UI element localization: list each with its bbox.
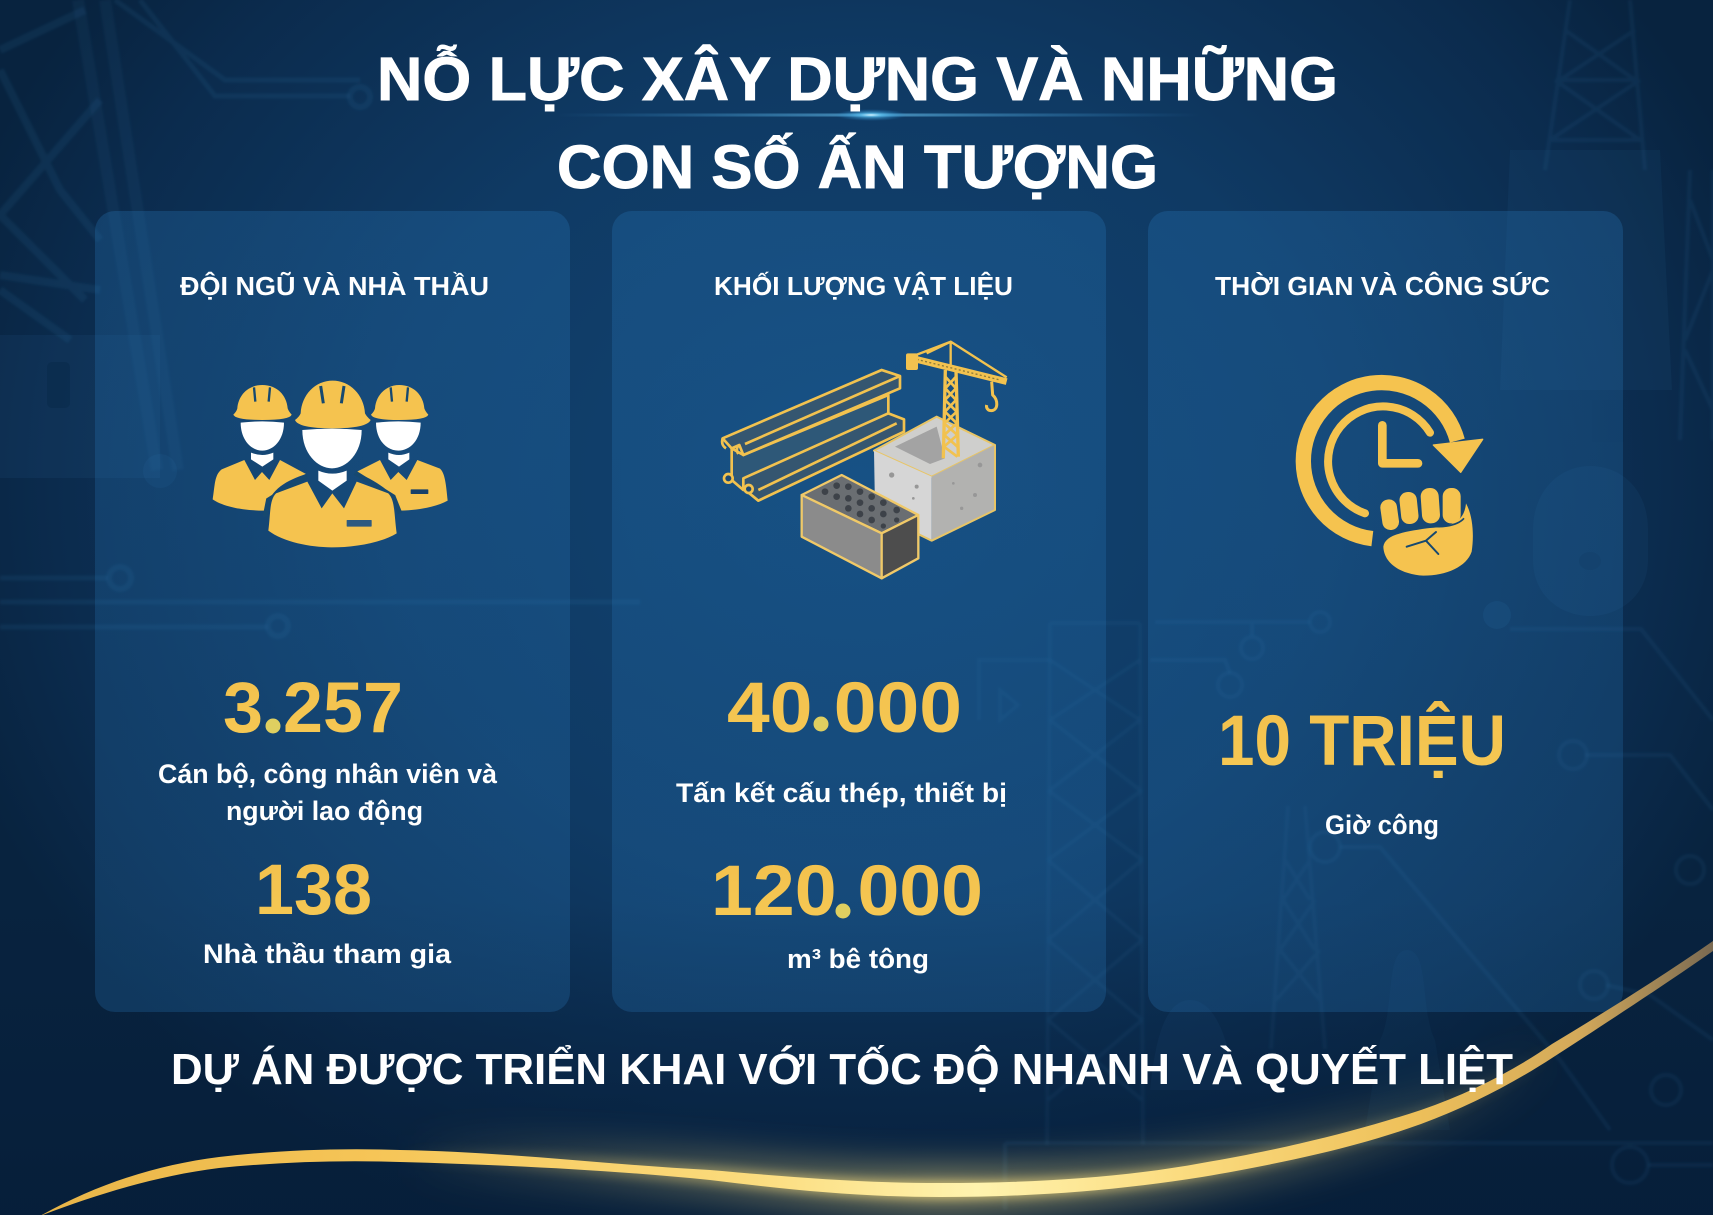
panel: time and effort — [1148, 211, 1623, 1012]
title light flare — [557, 109, 1200, 121]
stat: 10 million man-hours: Giờ công — [1325, 810, 1439, 840]
stat: 40.000 tons of steel — [676, 669, 1007, 808]
heading: team: ĐỘI NGŨ VÀ NHÀ THẦU — [180, 271, 489, 301]
panel: material volume — [612, 211, 1106, 1012]
stat: 10 million man-hours: 10 TRIỆU — [1218, 701, 1506, 781]
title — [377, 45, 1338, 201]
icon: steel beams, concrete blocks and crane — [722, 342, 1007, 578]
icon: clock with arrow and raised fist — [1303, 383, 1483, 576]
stat: 138 contractors: 138 — [255, 851, 372, 930]
golden swoosh — [40, 941, 1713, 1215]
stat: 120.000 m3 concrete — [711, 852, 983, 974]
heading: time: THỜI GIAN VÀ CÔNG SỨC — [1215, 271, 1550, 301]
closing statement: DỰ ÁN ĐƯỢC TRIỂN KHAI VỚI TỐC ĐỘ NHANH VÀ QUYẾT LIỆT — [171, 1043, 1513, 1094]
icon: three workers in helmets — [213, 381, 448, 547]
title: CON SỐ ẤN TƯỢNG — [557, 133, 1158, 201]
stat: 120.000 m3 concrete: 120.000 — [711, 852, 983, 931]
stat: 40.000 tons of steel: 40.000 — [727, 669, 962, 748]
stat: 3.257 staff: người lao động — [226, 796, 423, 826]
stat: 3.257 staff: Cán bộ, công nhân viên và — [158, 759, 498, 789]
stat: 3.257 staff — [158, 669, 498, 826]
stat: 120.000 m3 concrete: m³ bê tông — [787, 944, 929, 974]
stat: 10 million man-hours — [1218, 701, 1506, 840]
heading: materials: KHỐI LƯỢNG VẬT LIỆU — [714, 271, 1013, 301]
stat: 3.257 staff: 3.257 — [223, 669, 403, 748]
panel: team and contractors — [95, 211, 570, 1012]
stat: 138 contractors — [203, 851, 452, 969]
stat: 138 contractors: Nhà thầu tham gia — [203, 939, 452, 969]
stat: 40.000 tons of steel: Tấn kết cấu thép, thiết bị — [676, 778, 1007, 808]
title: NỖ LỰC XÂY DỰNG VÀ NHỮNG — [377, 45, 1338, 113]
